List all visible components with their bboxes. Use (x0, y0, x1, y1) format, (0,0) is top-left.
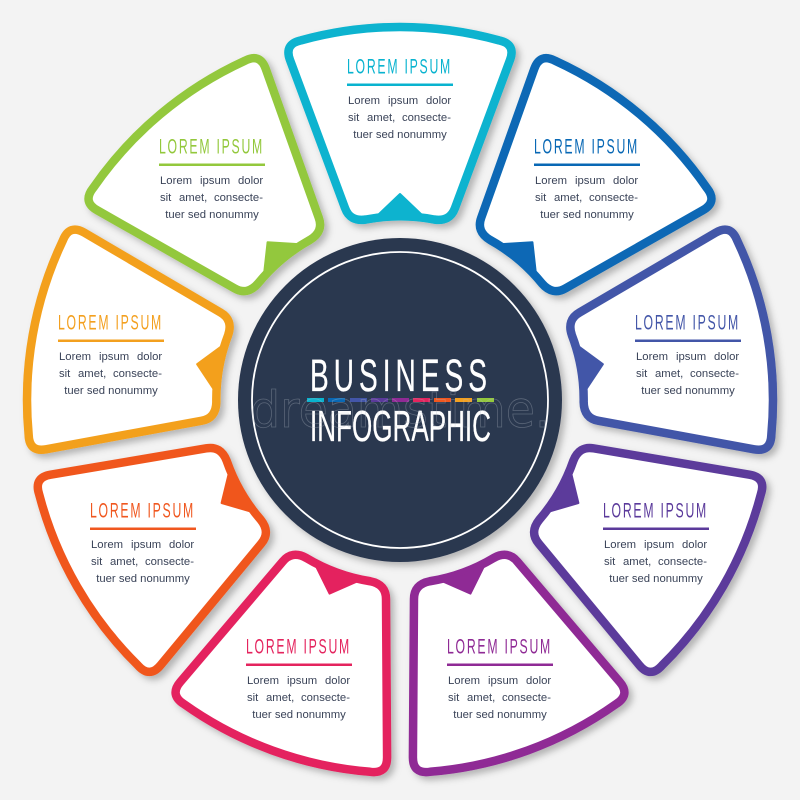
text block: crimson: ipsum (287, 675, 317, 687)
text block: orange: amet, (110, 556, 138, 568)
text block: indigo: dolor (714, 351, 739, 363)
text block: blue: sit (535, 192, 547, 204)
text block: teal: amet, (367, 112, 395, 124)
text block: teal: LOREM IPSUM (347, 56, 452, 78)
text block: teal: dolor (426, 95, 451, 107)
text block: purple: ipsum (488, 675, 518, 687)
text block: amber: consecte- (113, 368, 162, 380)
text block: blue: tuer sed nonummy (540, 209, 634, 221)
text block: green: consecte- (214, 192, 263, 204)
text block: teal: ipsum (388, 95, 418, 107)
text block: green: ipsum (200, 175, 230, 187)
text block: teal: Lorem (348, 95, 380, 107)
text block: green: tuer sed nonummy (165, 209, 259, 221)
panel: purple segment (357, 531, 632, 789)
text block: green: LOREM IPSUM (159, 136, 264, 158)
text block: purple: sit (448, 692, 460, 704)
text block: indigo: sit (636, 368, 648, 380)
text block: purple: consecte- (502, 692, 551, 704)
text block: indigo: consecte- (690, 368, 739, 380)
text block: orange: ipsum (131, 539, 161, 551)
text block: blue: consecte- (589, 192, 638, 204)
text block: orange: tuer sed nonummy (96, 573, 190, 585)
text block: green: dolor (238, 175, 263, 187)
text block: amber: sit (59, 368, 71, 380)
text block: amber (58, 312, 164, 397)
text block: amber: dolor (137, 351, 162, 363)
text block: violet: LOREM IPSUM (603, 500, 708, 522)
text block: crimson: Lorem (247, 675, 279, 687)
panel: indigo segment (558, 225, 787, 479)
watermark: dreamstime. (250, 381, 550, 439)
text block: green (159, 136, 265, 221)
text block: violet: tuer sed nonummy (609, 573, 703, 585)
text block: indigo: tuer sed nonummy (641, 385, 735, 397)
text block: violet (603, 500, 709, 585)
text block: teal (347, 56, 453, 141)
text block: violet: sit (604, 556, 616, 568)
text block: violet: ipsum (644, 539, 674, 551)
colour dashes (307, 398, 494, 402)
text block: crimson: sit (247, 692, 259, 704)
text block: crimson: dolor (325, 675, 350, 687)
text block: amber: Lorem (59, 351, 91, 363)
text block: orange (90, 500, 196, 585)
text block: orange: LOREM IPSUM (90, 500, 195, 522)
text block: violet: Lorem (604, 539, 636, 551)
text block: teal: consecte- (402, 112, 451, 124)
text block: amber: tuer sed nonummy (64, 385, 158, 397)
text block: crimson: LOREM IPSUM (246, 636, 351, 658)
panel: blue segment (430, 43, 725, 334)
text block: purple: LOREM IPSUM (447, 636, 552, 658)
text block: crimson (246, 636, 352, 721)
panel: violet segment (500, 393, 779, 683)
text block: green: amet, (179, 192, 207, 204)
text block: indigo: ipsum (676, 351, 706, 363)
text block: indigo: Lorem (636, 351, 668, 363)
text block: violet: amet, (623, 556, 651, 568)
text block: purple: tuer sed nonummy (453, 709, 547, 721)
text block: teal: tuer sed nonummy (353, 129, 447, 141)
text block: crimson: tuer sed nonummy (252, 709, 346, 721)
text block: crimson: amet, (266, 692, 294, 704)
text block: amber: ipsum (99, 351, 129, 363)
text block: blue: ipsum (575, 175, 605, 187)
text block: violet: dolor (682, 539, 707, 551)
text block: purple: amet, (467, 692, 495, 704)
text block: indigo: amet, (655, 368, 683, 380)
text block: orange: dolor (169, 539, 194, 551)
text block: orange: Lorem (91, 539, 123, 551)
text block: violet: consecte- (658, 556, 707, 568)
text block: blue: LOREM IPSUM (534, 136, 639, 158)
title: infographic: INFOGRAPHIC (310, 402, 491, 451)
text block: purple (447, 636, 553, 721)
text block: blue: dolor (613, 175, 638, 187)
panel: teal segment (288, 27, 512, 220)
text block: green: Lorem (160, 175, 192, 187)
text block: amber: amet, (78, 368, 106, 380)
text block: blue (534, 136, 640, 221)
text block: green: sit (160, 192, 172, 204)
text block: blue: Lorem (535, 175, 567, 187)
panel: amber segment (13, 225, 242, 479)
center circle (238, 238, 562, 562)
text block: crimson: consecte- (301, 692, 350, 704)
panel: green segment (75, 43, 370, 334)
text block: amber: LOREM IPSUM (58, 312, 163, 334)
panel: orange segment (21, 393, 300, 683)
text block: orange: sit (91, 556, 103, 568)
text block: indigo (635, 312, 741, 397)
text block: purple: Lorem (448, 675, 480, 687)
text block: blue: amet, (554, 192, 582, 204)
title: business: BUSINESS (310, 350, 492, 401)
panel: crimson segment (168, 531, 443, 789)
text block: orange: consecte- (145, 556, 194, 568)
text block: purple: dolor (526, 675, 551, 687)
text block: teal: sit (348, 112, 360, 124)
